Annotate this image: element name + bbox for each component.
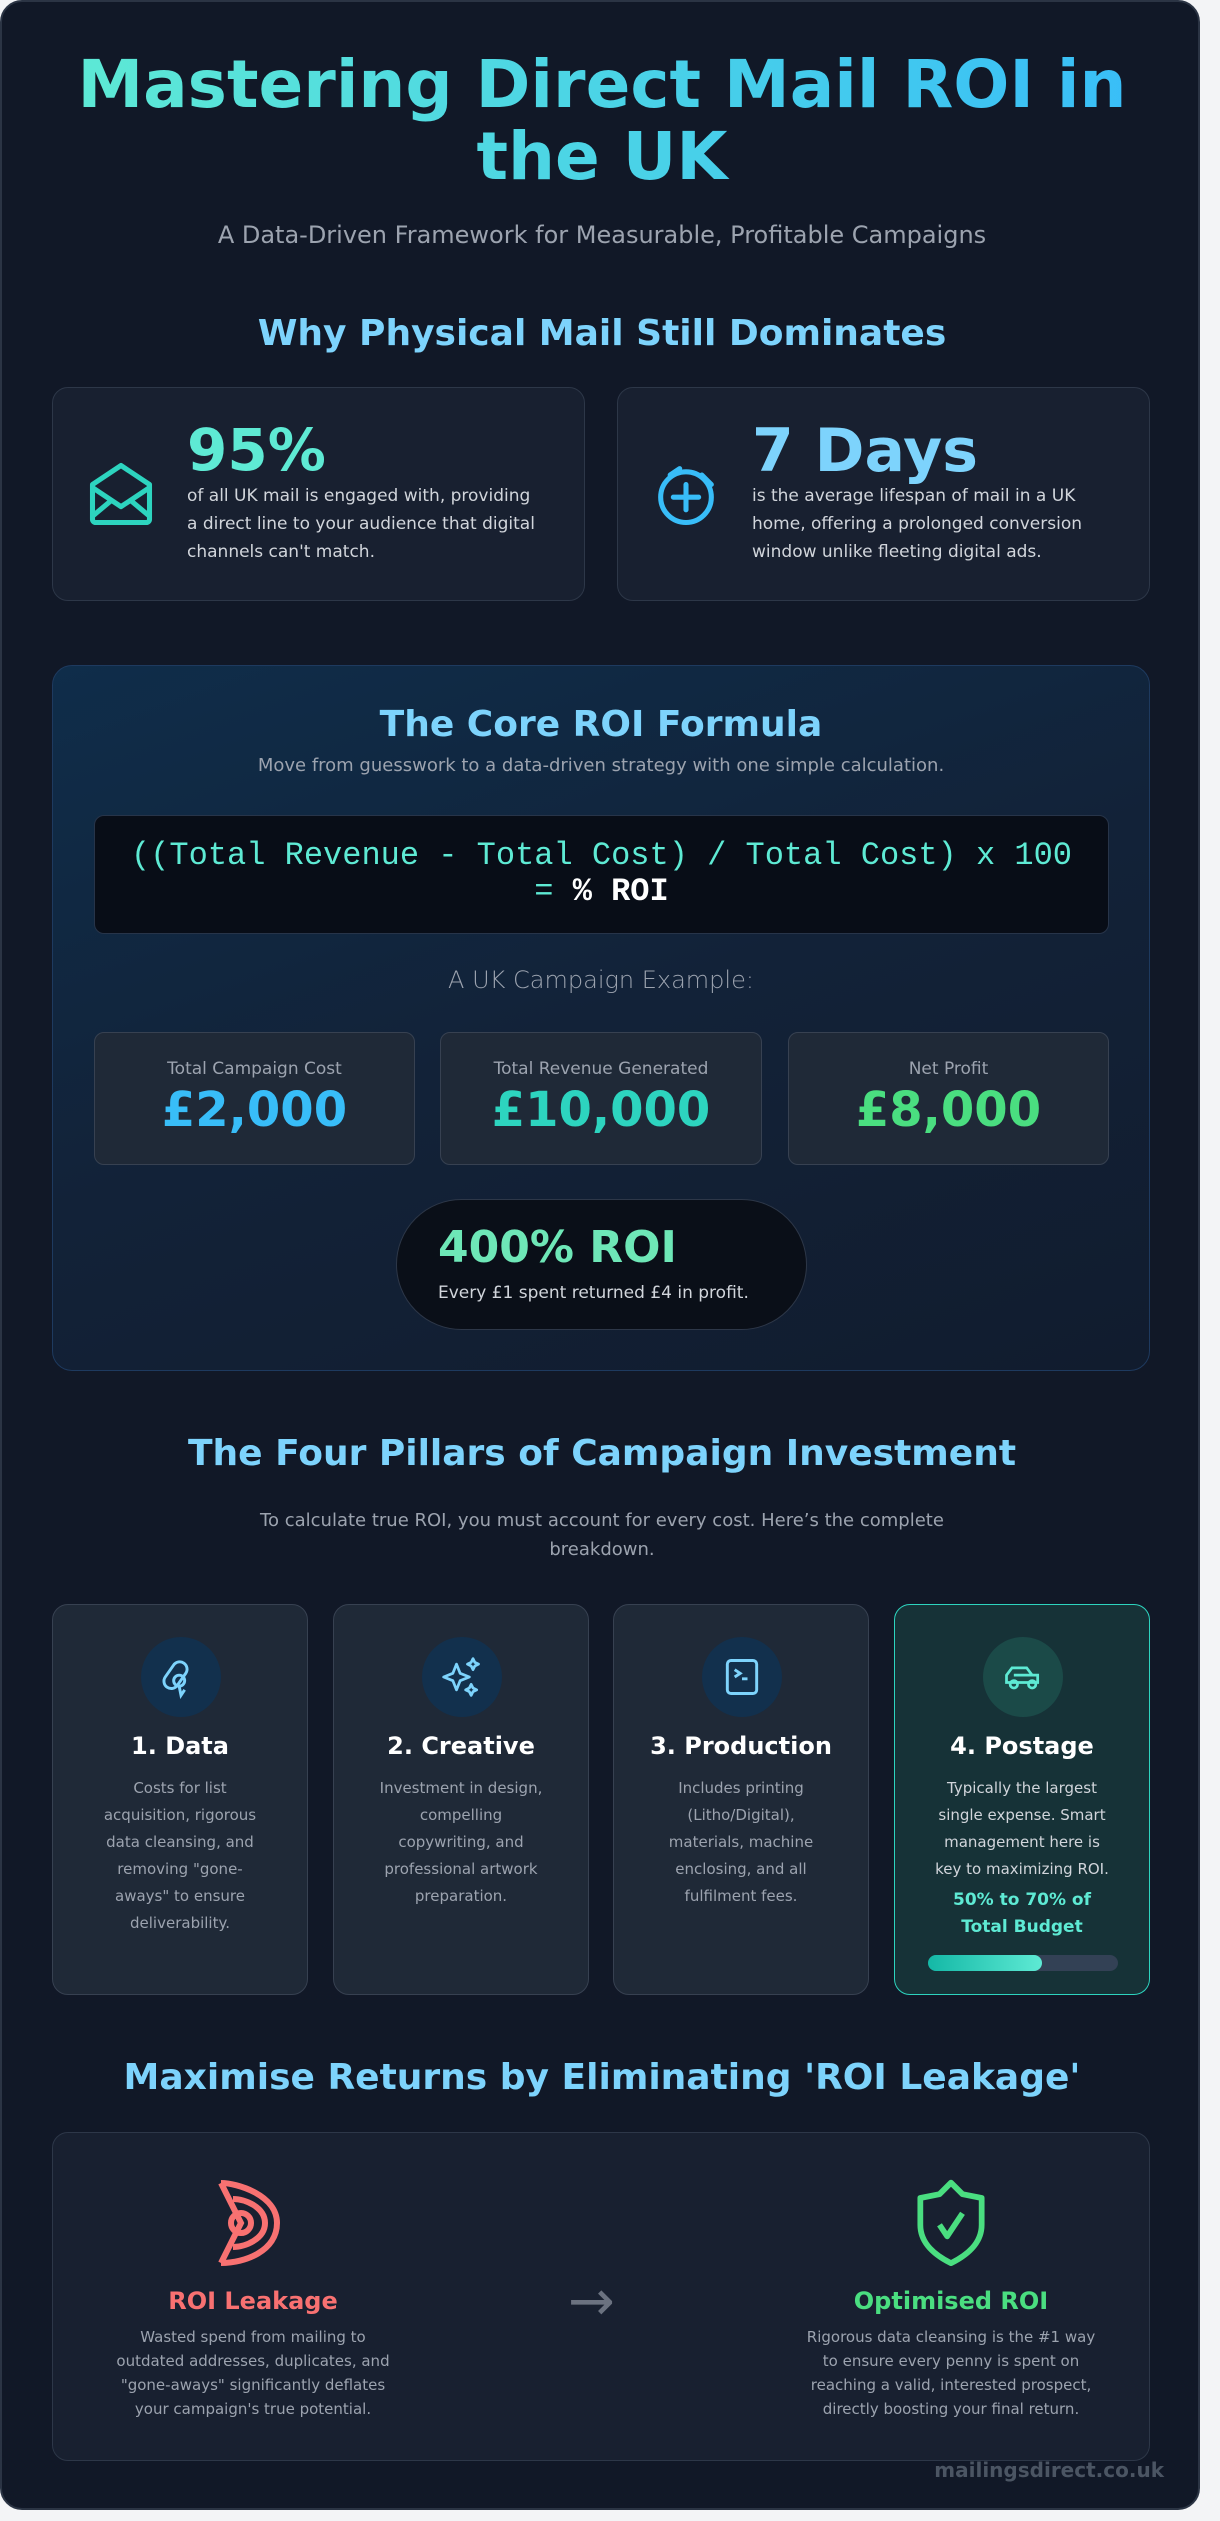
pillar: data: Costs for list acquisition, rigorous data cleansing, and removing "gone-aways" to ensure deliverability. [104,1779,256,1932]
optimised text: Rigorous data cleansing is the #1 way to ensure every penny is spent on reaching a valid, interested prospect, directly boosting your final return. [807,2328,1095,2418]
panel: leakage comparison [52,2132,1150,2461]
formula box: ((Total Revenue - Total Cost) / Total Cost) x 100 [131,837,1072,874]
pillars intro: To calculate true ROI, you must account for every cost. Here’s the complete breakdown. [260,1510,944,1560]
optimised title: Optimised ROI [854,2287,1048,2315]
heading: leakage: Maximise Returns by Eliminating 'ROI Leakage' [124,2057,1080,2098]
icon: clock plus [658,466,714,525]
card: profit: Net Profit [909,1059,988,1079]
result pill: Every £1 spent returned £4 in profit. [438,1283,749,1303]
subheading: Move from guesswork to a data-driven strategy with one simple calculation. [258,755,944,776]
pillar: data [52,1604,308,1995]
icon: sparkles [422,1637,502,1717]
card: cost: Total Campaign Cost [167,1059,342,1079]
pillar: creative [333,1604,589,1995]
card: profit: £8,000 [856,1082,1041,1138]
icon: shield check [917,2180,985,2266]
result pill: 400% ROI [438,1222,677,1273]
pillar: postage [894,1604,1150,1995]
card: cost: £2,000 [162,1082,347,1138]
pillar: production: 3. Production [650,1732,832,1760]
stat card: 7 days [617,387,1150,601]
icon: terminal [702,1637,782,1717]
postage share: 50% to 70% of [953,1890,1091,1910]
pillar: creative: Investment in design, compelling copywriting, and professional artwork preparation. [380,1779,542,1905]
stat text: is the average lifespan of mail in a UK home, offering a prolonged conversion window unlike fleeting digital ads. [752,486,1082,562]
stat card: 95% [52,387,585,601]
pillar: postage: Typically the largest single expense. Smart management here is key to maximizing ROI. [935,1779,1109,1878]
progress bar [928,1955,1118,1971]
example label: A UK Campaign Example: [448,966,754,994]
icon: vehicle [983,1637,1063,1717]
footer: mailingsdirect.co.uk [934,2458,1164,2482]
heading: four pillars: The Four Pillars of Campaign Investment [188,1433,1016,1474]
leak title: ROI Leakage [168,2287,338,2315]
subtitle: A Data-Driven Framework for Measurable, Profitable Campaigns [218,221,986,249]
card: profit [788,1032,1109,1165]
formula box: = % ROI [534,873,669,910]
heading: The Core ROI Formula [380,704,822,745]
icon: envelope [90,462,152,525]
stat number: 7 Days [752,416,978,486]
pillar: postage: 4. Postage [950,1732,1094,1760]
stat number: 95% [187,416,326,484]
formula box [94,815,1109,934]
pillar: creative: 2. Creative [387,1732,535,1760]
card: cost [94,1032,415,1165]
panel: ROI formula [52,665,1150,1371]
result pill [396,1199,807,1330]
postage share [953,1890,1092,1937]
card: revenue: Total Revenue Generated [494,1059,708,1079]
title: Mastering Direct Mail ROI in the UK [77,46,1127,195]
heading: why physical mail: Why Physical Mail Still Dominates [258,313,946,354]
arrow: → [568,2269,615,2334]
postage share: Total Budget [961,1917,1083,1937]
pillar: production: Includes printing (Litho/Digital), materials, machine enclosing, and all fulfilment fees. [669,1779,813,1905]
icon: leak [218,2180,280,2266]
icon: data [141,1637,221,1717]
pillar: production [613,1604,869,1995]
card: revenue: £10,000 [492,1082,710,1138]
leak text: Wasted spend from mailing to outdated addresses, duplicates, and "gone-aways" significantly deflates your campaign's true potential. [116,2328,390,2418]
pillar: data: 1. Data [131,1732,229,1760]
card: revenue [440,1032,762,1165]
stat text: of all UK mail is engaged with, providing a direct line to your audience that digital channels can't match. [187,486,535,562]
